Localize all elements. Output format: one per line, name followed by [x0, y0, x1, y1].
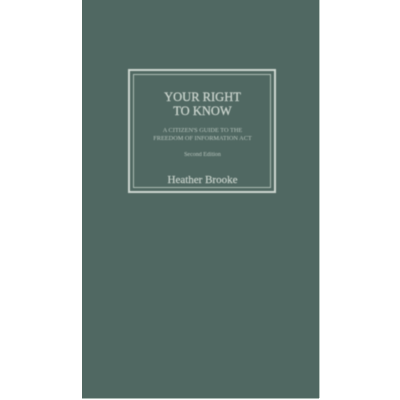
subtitle: FREEDOM OF INFORMATION ACT	[153, 135, 252, 142]
author: Heather Brooke	[168, 174, 237, 186]
title frame inner	[133, 74, 271, 188]
title	[164, 90, 242, 118]
book cover	[82, 0, 319, 398]
subtitle	[153, 127, 252, 142]
edition: Second Edition	[184, 152, 221, 158]
title frame outer	[128, 69, 276, 193]
title: YOUR RIGHT	[164, 90, 241, 104]
subtitle: A CITIZEN'S GUIDE TO THE	[163, 127, 242, 134]
title: TO KNOW	[173, 104, 232, 118]
